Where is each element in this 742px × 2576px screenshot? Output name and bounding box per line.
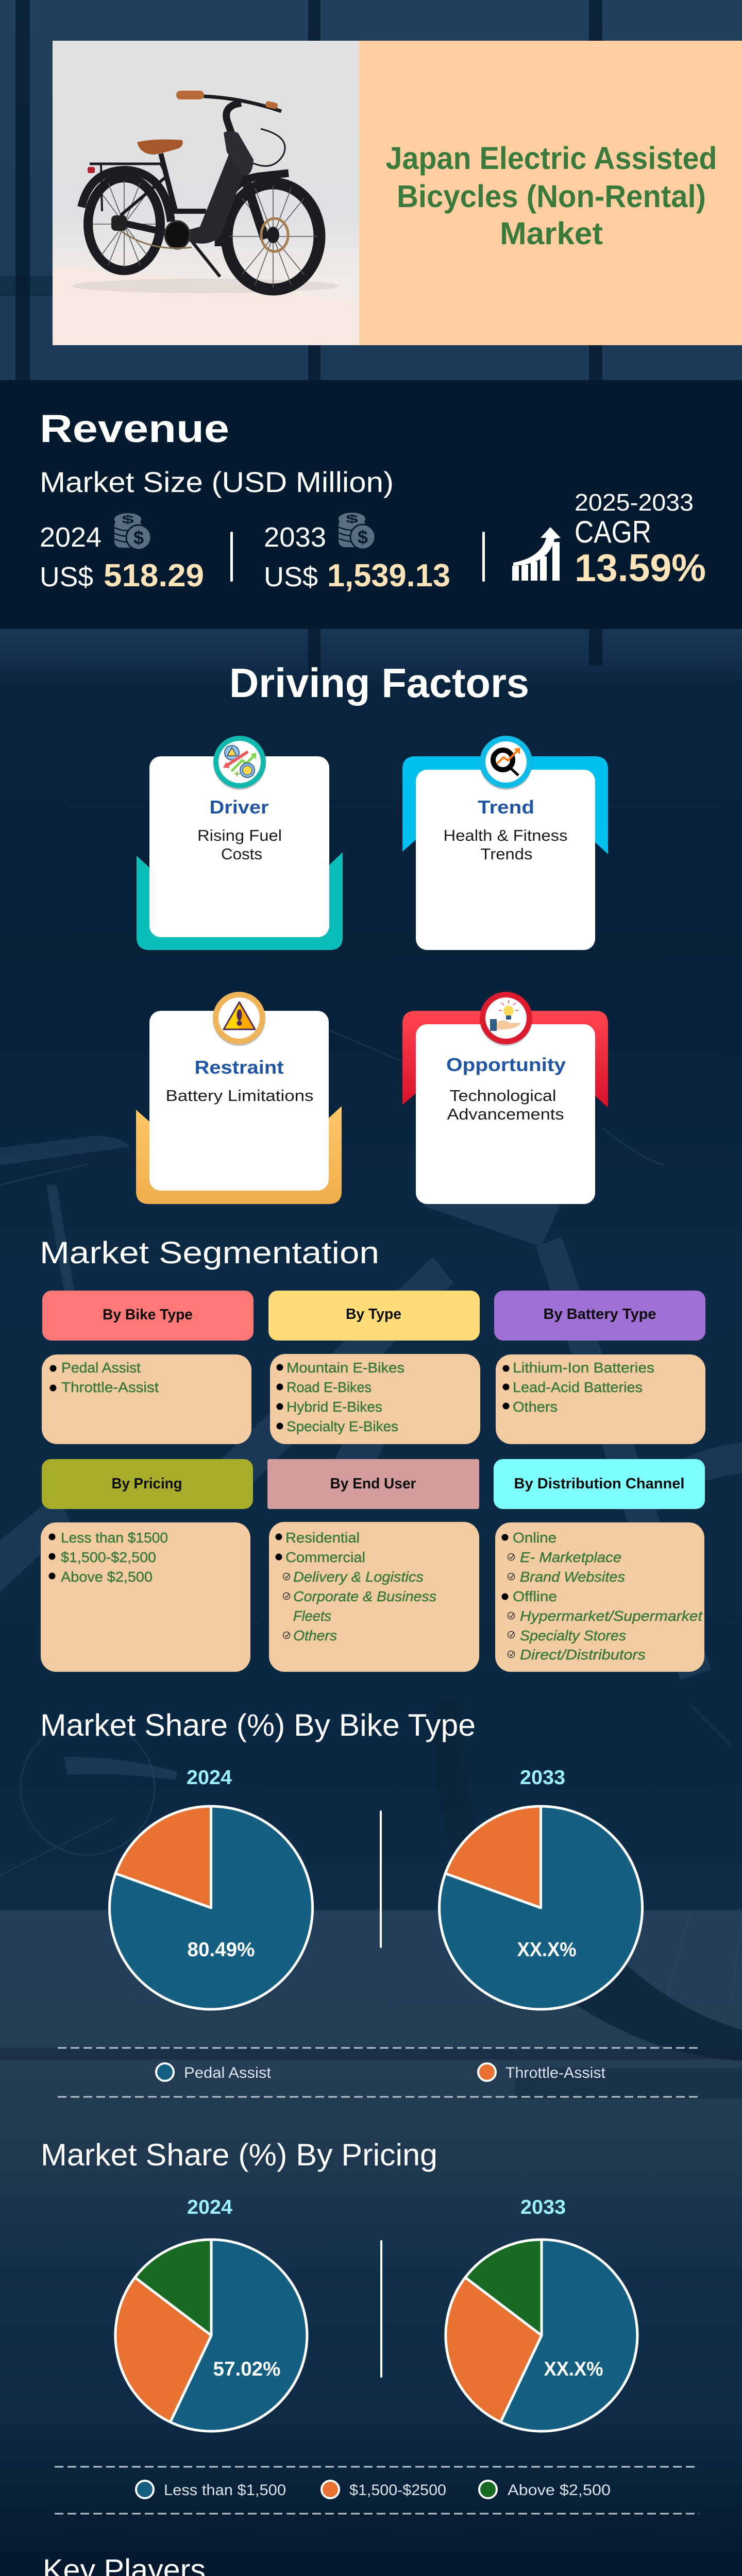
segment: by pricing: [41, 1459, 253, 1672]
segment: by distribution channel: Specialty Stores: [520, 1628, 626, 1643]
label: opportunity: Opportunity: [446, 1054, 566, 1075]
text: technological advancements: [447, 1087, 564, 1123]
stat: CAGR: 13.59%: [575, 546, 706, 589]
icon: coin stack 2024: [114, 513, 151, 550]
hero panel: title and bicycle photo: [53, 41, 742, 345]
stat: 2024 revenue: US$: [40, 562, 93, 592]
legend: pricing: Above $2,500: [508, 2482, 611, 2499]
pie chart: pricing 2033: [446, 2196, 637, 2431]
illustration: electric bicycle photo: [53, 41, 359, 345]
legend: bike type: Pedal Assist: [184, 2064, 272, 2081]
icon: trend badge: [480, 736, 532, 790]
segment: by type: Specialty E-Bikes: [286, 1418, 398, 1434]
pie chart: bike type 2024: 80.49%: [188, 1939, 255, 1961]
segment: by battery type: By Battery Type: [543, 1306, 656, 1323]
segment: by end user: Residential: [285, 1530, 360, 1546]
icon: restraint badge: [213, 992, 265, 1046]
segment: by battery type: Lithium-Ion Batteries: [513, 1360, 654, 1376]
pie chart: bike type 2033: 2033: [520, 1767, 565, 1789]
segment: by end user: By End User: [330, 1476, 416, 1492]
segment: by distribution channel: [494, 1459, 705, 1672]
segment: by end user: Corporate & Business: [293, 1588, 436, 1604]
segment: by distribution channel: By Distribution Channel: [514, 1476, 684, 1492]
segment: by distribution channel: Brand Websites: [520, 1569, 625, 1585]
stat: 2033 revenue: US$: [264, 562, 318, 592]
icon: opportunity badge: [480, 992, 532, 1046]
segment: by end user: Commercial: [285, 1549, 365, 1565]
stat: 2033 revenue: 2033: [264, 522, 326, 553]
pie chart: pricing 2033: XX.X%: [544, 2358, 603, 2380]
pie chart: bike type 2024: 2024: [187, 1767, 232, 1789]
segment: by pricing: $1,500-$2,500: [61, 1549, 156, 1565]
subheading: market size: Market Size (USD Million): [40, 466, 394, 498]
heading: driving factors: Driving Factors: [229, 660, 529, 706]
segment: by distribution channel: Direct/Distributors: [520, 1647, 646, 1663]
text: rising fuel costs: [197, 826, 282, 863]
pie chart: pricing 2024: 2024: [187, 2196, 232, 2218]
legend: pricing: [136, 2481, 611, 2499]
segment: by type: [268, 1291, 480, 1444]
panel: revenue: [0, 380, 742, 629]
segment: by type: Road E-Bikes: [286, 1379, 372, 1395]
segment: by bike type: By Bike Type: [103, 1307, 193, 1323]
segment: by type: Hybrid E-Bikes: [286, 1399, 382, 1415]
icon: coin stack 2033: [339, 513, 375, 549]
pie chart: pricing 2024: [115, 2196, 307, 2431]
segment: by end user: Delivery & Logistics: [293, 1569, 424, 1585]
text: technological advancements: Technological: [449, 1087, 556, 1105]
segment: by type: By Type: [346, 1306, 401, 1323]
label: driver: Driver: [209, 796, 269, 818]
segment: by distribution channel: Offline: [513, 1588, 557, 1604]
pie chart: bike type 2033: [440, 1767, 643, 2009]
text: technological advancements: Advancements: [447, 1105, 564, 1123]
segment: by pricing: Above $2,500: [61, 1569, 153, 1585]
stat: 2024 revenue: 2024: [40, 522, 102, 553]
stat: 2033 revenue: [264, 522, 450, 594]
card: opportunity: [402, 992, 608, 1204]
pie chart: bike type 2024: [110, 1767, 313, 2009]
icon: coin stack 2033: $: [346, 513, 358, 526]
text: rising fuel costs: Costs: [221, 845, 262, 863]
stat: CAGR: CAGR: [575, 515, 651, 549]
segment: by distribution channel: E- Marketplace: [520, 1549, 621, 1565]
heading: market share by bike type: Market Share (%) By Bike Type: [40, 1708, 476, 1742]
title: Bicycles (Non-Rental): [397, 179, 706, 214]
text: health and fitness trends: [443, 826, 568, 863]
segment: by pricing: By Pricing: [111, 1476, 182, 1492]
title: Market: [500, 216, 603, 251]
card: restraint: [136, 992, 342, 1204]
segment: by type: Mountain E-Bikes: [286, 1360, 404, 1376]
segment: by bike type: Throttle-Assist: [61, 1379, 159, 1395]
legend: pricing: Less than $1,500: [164, 2482, 286, 2499]
text: rising fuel costs: Rising Fuel: [197, 826, 282, 844]
icon: coin stack 2024: $: [133, 527, 144, 548]
legend: pricing: $1,500-$2500: [349, 2482, 446, 2499]
stat: 2033 revenue: 1,539.13: [327, 558, 450, 594]
segment: by end user: Others: [293, 1628, 337, 1643]
card: trend: [402, 736, 608, 950]
pie chart: bike type 2033: XX.X%: [517, 1939, 576, 1961]
heading: market segmentation: Market Segmentation: [40, 1235, 379, 1270]
segment: by battery type: [494, 1291, 705, 1444]
pie chart: pricing 2024: 57.02%: [213, 2358, 280, 2380]
segment: by distribution channel: Online: [513, 1530, 556, 1546]
legend: bike type: Throttle-Assist: [505, 2064, 606, 2081]
text: health and fitness trends: Trends: [480, 845, 533, 863]
icon: coin stack 2024: $: [122, 513, 134, 526]
segment: by pricing: Less than $1500: [61, 1530, 168, 1546]
segment: by battery type: Others: [513, 1399, 558, 1415]
segment: by bike type: Pedal Assist: [61, 1360, 141, 1376]
segment: by end user: [267, 1459, 479, 1672]
icon: growth arrow: [512, 527, 561, 581]
title: [385, 141, 717, 251]
legend: bike type: [156, 2063, 606, 2081]
card: driver: [137, 736, 343, 950]
segment: by bike type: [42, 1291, 254, 1444]
label: trend: Trend: [478, 796, 534, 818]
segment: by battery type: Lead-Acid Batteries: [513, 1379, 643, 1395]
heading: revenue: Revenue: [40, 407, 229, 451]
label: restraint: Restraint: [195, 1057, 284, 1078]
heading: market share by pricing: Market Share (%) By Pricing: [41, 2138, 437, 2172]
segment: by end user: Fleets: [293, 1608, 331, 1624]
text: health and fitness trends: Health & Fitness: [443, 826, 568, 844]
text: battery limitations: Battery Limitations: [166, 1087, 313, 1105]
icon: driver badge: [213, 736, 266, 790]
pie chart: pricing 2033: 2033: [520, 2196, 566, 2218]
segment: by distribution channel: Hypermarket/Supermarket: [520, 1608, 703, 1624]
stat: 2024 revenue: [40, 522, 204, 594]
stat: CAGR: 2025-2033: [575, 489, 694, 516]
stat: CAGR: [575, 489, 706, 589]
title: Japan Electric Assisted: [385, 141, 717, 176]
icon: coin stack 2033: $: [358, 527, 368, 548]
stat: 2024 revenue: 518.29: [104, 558, 204, 594]
